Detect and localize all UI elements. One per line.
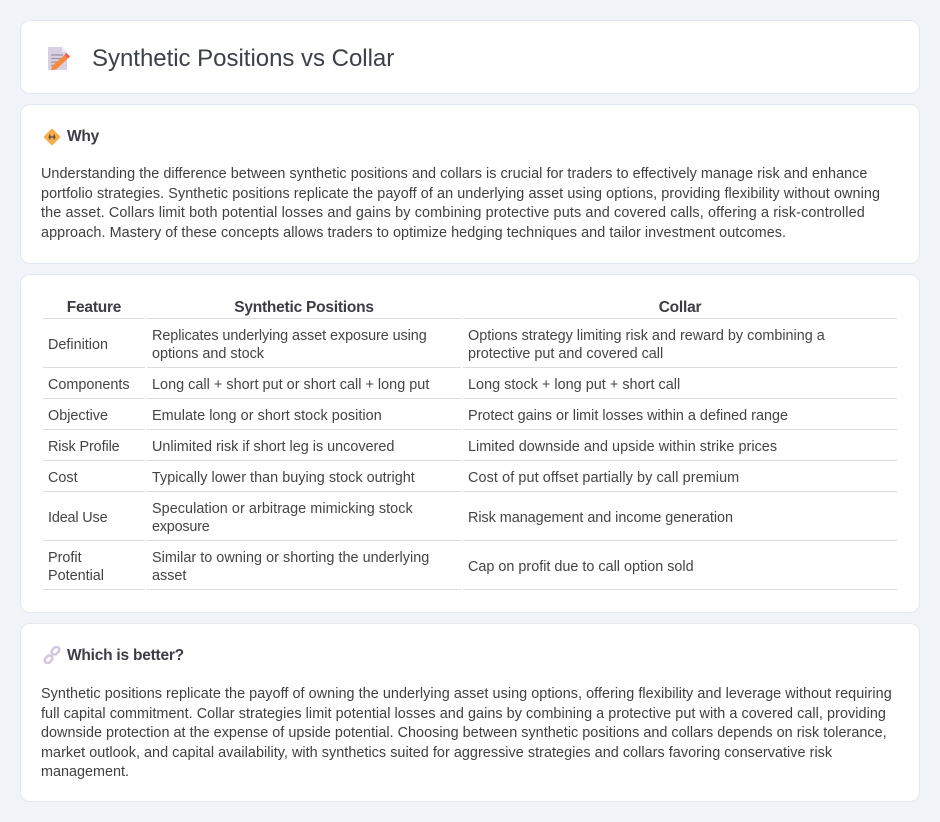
table: comparison: asset — [152, 568, 186, 584]
table: comparison: Long call + short put or short call + long put — [152, 377, 429, 393]
panel: which is better — [20, 623, 920, 802]
text block: which is better: market outlook, and capital availability, with synthetics suited for aggressive strategies and collars favoring conservative risk — [41, 744, 832, 760]
table: comparison: Speculation or arbitrage mimicking stock — [152, 501, 413, 517]
table: comparison: Similar to owning or shorting the underlying — [152, 550, 429, 566]
text block: why: the asset. Collars limit both potential losses and gains by combining protective puts and covered calls, offering a risk-controlled — [41, 205, 865, 221]
icon: chain link — [43, 646, 61, 664]
text block: why: portfolio strategies. Synthetic positions replicate the payoff of an underlying asset using options, providing flexibility without owning — [41, 186, 880, 202]
text block: why: approach. Mastery of these concepts allows traders to optimize hedging techniques and tailor investment outcomes. — [41, 224, 786, 240]
table: comparison — [43, 299, 897, 590]
table: comparison: Options strategy limiting risk and reward by combining a — [468, 328, 825, 344]
column header: feature: Feature — [67, 299, 121, 316]
row: objective: Objective — [48, 408, 108, 424]
text block: which is better — [41, 686, 892, 780]
table: comparison: Replicates underlying asset exposure using — [152, 328, 427, 344]
icon: document with pencil — [48, 47, 70, 70]
text block: which is better: management. — [41, 764, 129, 780]
text block: which is better: full capital commitment. Collar strategies limit potential losses and gains by combining a protective put with a covered call, providing — [41, 706, 886, 722]
heading: why: Why — [67, 128, 99, 145]
table: comparison: Unlimited risk if short leg is uncovered — [152, 439, 394, 455]
table: comparison: Risk management and income generation — [468, 510, 733, 526]
heading: which is better: Which is better? — [67, 647, 184, 664]
panel: comparison table — [20, 274, 920, 613]
table: comparison: Typically lower than buying stock outright — [152, 470, 415, 486]
table: comparison: Limited downside and upside within strike prices — [468, 439, 777, 455]
table: comparison: Cap on profit due to call option sold — [468, 559, 694, 575]
panel: why — [20, 104, 920, 264]
table: comparison: Emulate long or short stock position — [152, 408, 382, 424]
row: profit potential: Potential — [48, 568, 104, 584]
row: profit potential — [48, 550, 104, 584]
text block: which is better: downside protection at the expense of upside potential. Choosing between synthetic positions and collars depends on risk tolerance, — [41, 725, 887, 741]
row: cost: Cost — [48, 470, 78, 486]
table: comparison: Long stock + long put + short call — [468, 377, 680, 393]
table: comparison: Protect gains or limit losses within a defined range — [468, 408, 788, 424]
row: definition: Definition — [48, 337, 108, 353]
table: comparison: exposure — [152, 519, 210, 535]
column header: collar: Collar — [659, 299, 701, 316]
table: comparison: Cost of put offset partially by call premium — [468, 470, 739, 486]
text block: why: Understanding the difference between synthetic positions and collars is crucial for traders to effectively manage risk and enhance — [41, 166, 867, 182]
row: components: Components — [48, 377, 130, 393]
row: profit potential: Profit — [48, 550, 82, 566]
icon: diamond warning sign — [44, 128, 60, 146]
row: ideal use: Ideal Use — [48, 510, 107, 526]
column header: synthetic positions: Synthetic Positions — [234, 299, 374, 316]
title: Synthetic Positions vs Collar — [92, 45, 394, 72]
text block: which is better: Synthetic positions replicate the payoff of owning the underlying asset using options, offering flexibility and leverage without requiring — [41, 686, 892, 702]
row: risk profile: Risk Profile — [48, 439, 120, 455]
table: comparison: options and stock — [152, 346, 264, 362]
panel: title card — [20, 20, 920, 94]
text block: why — [41, 166, 880, 240]
table: comparison: protective put and covered call — [468, 346, 663, 362]
